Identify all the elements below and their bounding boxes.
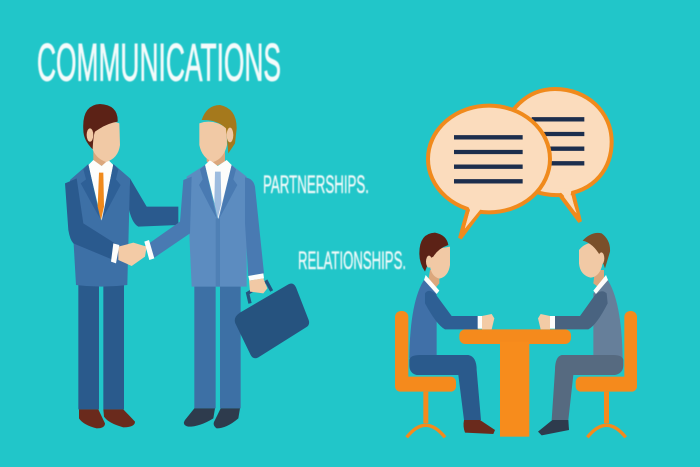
table [459,329,571,437]
hair [419,233,448,272]
neck [93,148,109,166]
arm holding briefcase [245,177,264,276]
ear [227,128,233,142]
arm [555,291,608,329]
collar [593,275,608,294]
collar [424,275,439,294]
chair back [395,311,408,386]
shoe [538,420,569,435]
cuff [248,273,264,281]
front speech bubble [428,106,550,238]
hair [583,233,610,268]
jacket [187,165,247,287]
bubble tail [460,208,480,238]
chair stem [423,392,428,423]
hand [538,314,550,329]
text: COMMUNICATIONS [37,34,281,92]
chair seat [395,377,456,392]
illustration: meeting at table [395,89,637,437]
chair feet [407,425,445,437]
chair seat [576,377,637,392]
jacket [409,278,437,358]
hair [202,105,237,153]
shoe [464,420,495,434]
hand on handle [249,278,267,293]
man with orange tie [65,104,178,428]
right chair [576,311,637,437]
bubble outline [498,89,612,195]
bubble tail [559,192,580,222]
tail fill [557,188,577,213]
back speech bubble [498,89,612,222]
shirt [205,160,232,219]
table leg [500,342,529,437]
tie [98,173,104,220]
hair [83,104,118,149]
cuffs [111,240,154,263]
label: partnerships: PARTNERSHIPS. [263,171,369,199]
ear [426,256,432,268]
shoes [79,409,135,428]
text lines [532,119,584,163]
lapels [81,164,121,218]
trousers [409,355,481,420]
jacket seam [216,218,220,287]
trousers [194,285,241,408]
ear [598,252,604,264]
neck [207,152,225,166]
briefcase [235,283,309,358]
neck [593,270,604,288]
tail fill [465,205,480,228]
left seated man [409,233,495,434]
neck [428,270,439,288]
chair feet [587,425,626,437]
cuff [478,316,483,329]
man with briefcase [149,105,309,428]
jacket [593,278,623,358]
lapels [199,165,237,218]
face [199,122,227,162]
hand [482,314,494,329]
arm reaching to handshake [149,177,192,258]
face [92,121,120,162]
bubble outline [428,106,550,212]
briefcase handle [248,282,272,303]
far arm [128,178,178,227]
shoes [184,408,240,428]
arm [425,291,478,329]
clasped hands [111,240,154,266]
hands [118,243,147,266]
chair stem [604,392,609,423]
ear [87,128,93,142]
shirt [88,160,113,221]
near arm [65,178,115,260]
chair back [624,311,637,386]
label: relationships: RELATIONSHIPS. [298,247,406,275]
cuff [549,316,555,329]
right seated man [538,233,623,435]
jacket [70,164,130,287]
text lines [454,137,523,181]
table top [459,329,571,344]
illustration: handshake [65,104,309,428]
left chair [395,311,456,437]
face [430,247,450,279]
face [579,242,603,278]
tie [214,172,221,218]
trousers [78,283,124,409]
trousers [552,355,623,420]
